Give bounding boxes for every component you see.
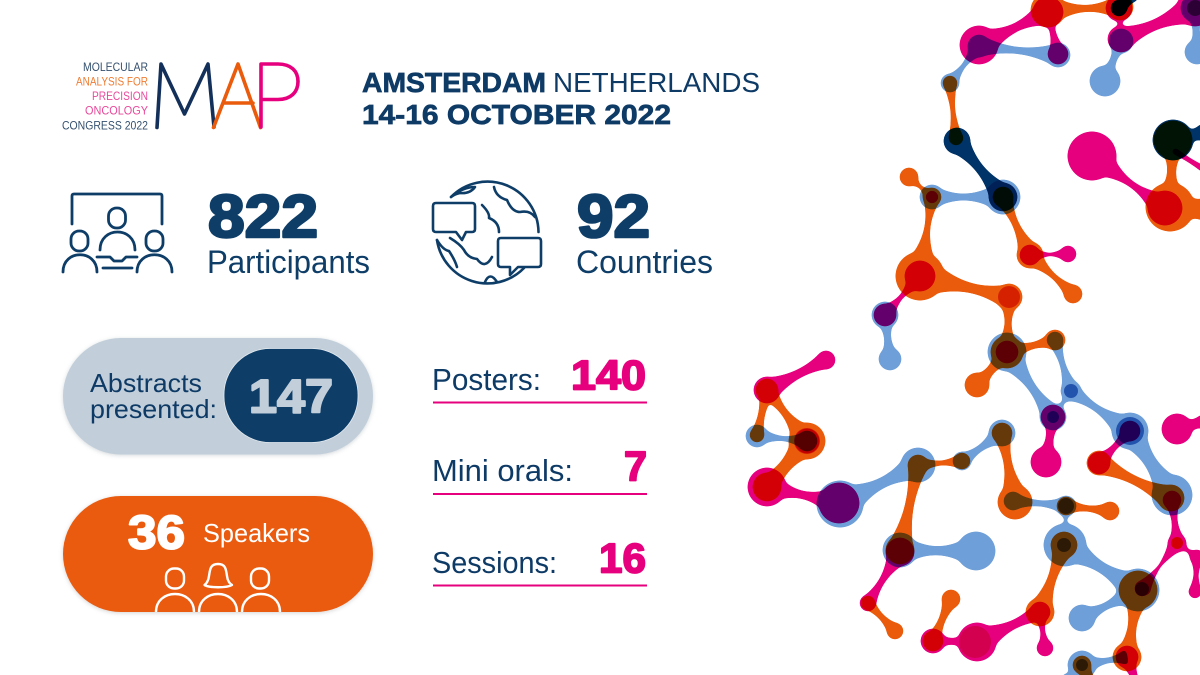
logo: MAP congress [62,62,298,132]
stat: 822 participants: Participants [207,244,370,280]
heading: location and dates: AMSTERDAM [362,67,546,98]
speakers label: Speakers [203,518,310,548]
icon: three speakers [156,564,280,612]
stat: 92 countries: 92 [577,183,650,250]
stat row: sessions [432,534,647,586]
stat row: sessions: 16 [599,534,646,582]
molecules: pink layer [748,0,1200,675]
molecules: orange layer [748,0,1200,675]
stat row: mini orals: Mini orals: [432,453,573,488]
stat row: mini orals: 7 [624,442,647,490]
logo wordmark text: CONGRESS 2022 [62,120,148,132]
heading: location and dates [362,67,760,130]
stat: 92 countries: Countries [576,244,713,280]
stat row: posters: Posters: [432,362,541,397]
logo letters MAP [157,64,298,128]
molecules: navy layer [944,0,1200,211]
molecules: soft inner shading [1057,0,1200,671]
logo wordmark text: ANALYSIS FOR [76,76,148,88]
panel: abstracts presented [63,338,373,454]
stat row: posters [432,352,647,404]
molecular network illustration [746,0,1200,675]
heading: location and dates: 14-16 OCTOBER 2022 [362,99,671,130]
abstracts label: Abstracts [90,368,202,398]
molecule: crimson node [959,626,991,658]
stat: 822 participants [207,183,370,280]
icon: globe with speech bubbles [433,182,541,283]
logo wordmark text [62,62,148,132]
stat row: sessions: Sessions: [432,545,557,580]
icon: participants around screen [63,194,172,272]
stat: 92 countries [576,183,713,280]
speakers count: 36 [128,506,185,558]
badge: 147 [224,348,358,442]
logo wordmark text: MOLECULAR [83,62,148,74]
molecules: inner blue accents [1047,384,1144,445]
panel: speakers [63,496,373,612]
heading: location and dates: NETHERLANDS [553,67,760,98]
stat: 822 participants: 822 [208,183,318,250]
badge: 147: 147 [249,370,333,422]
stat row: mini orals [432,442,647,495]
logo wordmark text: ONCOLOGY [85,106,148,118]
molecules: deep orange accents [794,286,1183,549]
stat row: posters: 140 [571,352,646,398]
logo wordmark text: PRECISION [92,91,148,103]
abstracts label: presented: [90,394,217,424]
molecules: blue layer [746,0,1200,675]
abstracts label [90,368,217,424]
